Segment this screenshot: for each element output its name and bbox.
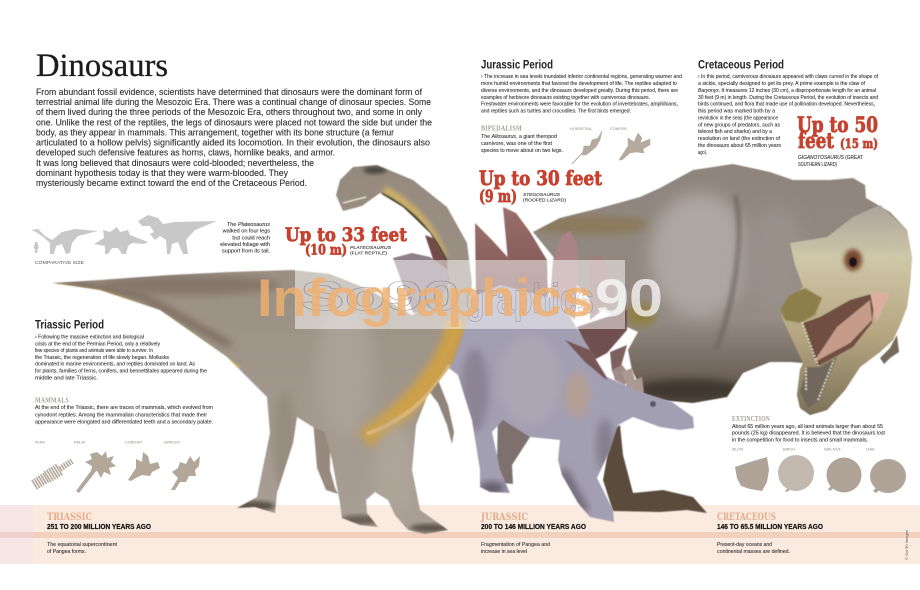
plateosaurus silhouette xyxy=(31,229,98,254)
body text: this period was marked both by a xyxy=(698,109,776,115)
far leg and foot xyxy=(603,425,707,513)
icon: ginkgo xyxy=(171,456,200,490)
body xyxy=(533,164,912,415)
intro text block xyxy=(36,87,432,189)
mammals note: cynodont reptiles. Among the mammalian characteristics that made their xyxy=(35,412,207,418)
size label: giganotosaurus: GIGANOTOSAURUS (GREAT xyxy=(798,155,864,161)
plant labels xyxy=(570,127,627,131)
body text: in the competition for food to insects and small mammals. xyxy=(732,437,868,443)
plateosaurus note: but could reach xyxy=(232,235,270,241)
timeline band xyxy=(0,505,920,564)
icon: oak xyxy=(870,459,906,493)
icon: human xyxy=(34,242,38,253)
body text: more humid environments that favored the development of life. The reptiles adapted to xyxy=(481,81,677,87)
bipedalism note: carnivore, was one of the first xyxy=(481,141,552,147)
intro text block: articulated to a hollow pelvis) significantly aided its locomotion. In their evolution, the dinosaurs also xyxy=(36,138,430,148)
intro text block: From abundant fossil evidence, scientists have determined that dinosaurs were the dominant form of xyxy=(36,87,422,98)
body text: the dinosaurs about 65 million years xyxy=(698,143,781,149)
lower jaw inner xyxy=(800,357,837,408)
intro text block: dominant hypothesis today is that they were warm-blooded. They xyxy=(36,168,288,179)
heading: Jurassic Period xyxy=(481,58,553,72)
shading, belly and neck colouring xyxy=(60,166,457,532)
body text: of new groups of predators, such as xyxy=(698,123,780,129)
period label: triassic: 251 TO 200 MILLION YEARS AGO xyxy=(47,524,152,531)
plateosaurus note: The Plateosaurus xyxy=(227,222,270,228)
dorsal plates xyxy=(393,207,644,394)
tree labels xyxy=(732,448,876,452)
teeth xyxy=(802,322,834,400)
bipedalism note: species to move about on two legs. xyxy=(481,148,563,154)
plate on body xyxy=(565,340,608,380)
heading: EXTINCTION xyxy=(732,415,770,423)
period label: cretaceous: Present-day oceans and xyxy=(717,542,772,548)
tree labels: OAK xyxy=(866,448,876,452)
bipedalism note: BIPEDALISM xyxy=(481,124,522,132)
intro text block: body, as they appear in mammals. This arrangement, together with its bone structure (a femur xyxy=(36,128,395,138)
plant labels xyxy=(35,440,180,444)
watermark outline text: So90 xyxy=(300,272,460,319)
body text: teleost fish and sharks) and by a xyxy=(698,129,773,135)
credit: © Sol 90 Images xyxy=(904,530,909,560)
mammals note: At the end of the Triassic, there are traces of mammals, which evolved from xyxy=(35,405,213,411)
body xyxy=(445,285,694,522)
body shading xyxy=(530,193,805,401)
icon: palm xyxy=(76,451,116,493)
period label: triassic: TRIASSIC xyxy=(47,512,92,523)
body text xyxy=(35,335,207,381)
period label: cretaceous xyxy=(717,512,824,555)
size label: giganotosaurus: feet xyxy=(798,128,834,153)
body text: for plants, families of ferns, conifers, and bennettitales appeared during the xyxy=(35,368,207,374)
snout xyxy=(780,288,822,323)
body text: › Following the massive extinction and biological xyxy=(35,335,144,341)
watermark main text: Infographics xyxy=(257,269,593,328)
far hind leg xyxy=(497,415,530,484)
body text: examples of herbivore dinosaurs existing together with carnivorous dinosaurs. xyxy=(481,95,650,101)
period label: cretaceous: CRETACEOUS xyxy=(717,512,776,523)
size label: giganotosaurus: Up to 50 xyxy=(797,112,878,137)
icon: willow xyxy=(735,457,769,491)
far hind leg xyxy=(313,420,338,494)
period label: jurassic xyxy=(480,512,587,555)
bipedalism note xyxy=(481,124,563,154)
body text: resolution on land (the extinction of xyxy=(698,136,780,142)
body text: birds continued, and flora that made use of pollination developed. Nevertheless, xyxy=(698,102,875,108)
giganotosaurus xyxy=(530,164,912,513)
intro text block: of them lived during the three periods of the Mesozoic Era, others throughout two, and some in only xyxy=(36,107,422,118)
body text: ago). xyxy=(698,150,707,156)
plant labels: GINKGO xyxy=(164,440,180,444)
heading: Cretaceous Period xyxy=(698,58,784,72)
size label: giganotosaurus xyxy=(797,112,878,168)
mouth xyxy=(803,293,875,367)
body text: › The increase in sea levels inundated inferior continental regions, generating warmer and xyxy=(481,74,682,80)
stegosaurus silhouette xyxy=(94,227,148,254)
body text: the Triassic, the regeneration of life slowly began. Mollusks xyxy=(35,355,169,361)
size label: giganotosaurus: (15 m) xyxy=(840,137,878,152)
watermark xyxy=(257,260,663,329)
body text xyxy=(698,74,878,156)
size label: stegosaurus: (ROOFED LIZARD) xyxy=(523,198,566,204)
body text xyxy=(481,74,682,115)
mammals note xyxy=(35,396,213,425)
stegosaurus xyxy=(393,207,694,522)
period label: jurassic: increase in sea level xyxy=(481,549,527,555)
body text: crisis at the end of the Permian Period, only a relatively xyxy=(35,341,160,347)
plateosaurus note xyxy=(220,222,270,255)
bipedalism note: The Allosaurus, a giant theropod xyxy=(481,134,557,140)
mammals note: appearance were elongated and differentiated teeth and a secondary palate. xyxy=(35,419,213,425)
period label: triassic: The equatorial supercontinent xyxy=(47,542,117,548)
period label: jurassic: JURASSIC xyxy=(480,512,528,523)
body text: Baryonyx. It measures 12 inches (30 cm), a disproportionate length for an animal xyxy=(698,88,876,94)
tree labels: WALNUT xyxy=(824,448,842,452)
size label: plateosaurus: Up to 33 feet xyxy=(285,224,407,246)
period label: jurassic: Fragmentation of Pangea and xyxy=(481,542,550,548)
period label: triassic: of Pangea forms. xyxy=(47,549,86,555)
body text: and reptiles such as turtles and crocodiles. The first birds emerged. xyxy=(481,109,631,115)
size label: plateosaurus: (10 m) xyxy=(305,242,347,258)
body text: diverse environments, and the dinosaurs developed greatly. During this period, there are xyxy=(481,88,678,94)
body text: dominated in marine environments, and reptiles dominated on land. As xyxy=(35,362,195,368)
body xyxy=(52,165,472,534)
icon: horsetail xyxy=(572,131,602,164)
plant labels: CONIFER xyxy=(125,440,142,444)
icon: walnut xyxy=(826,458,862,492)
comparative size caption: COMPARATIVE SIZE xyxy=(35,260,84,265)
body text: › In this period, carnivorous dinosaurs appeared with claws curved in the shape of xyxy=(698,74,878,80)
icon: fern xyxy=(34,461,72,485)
jaw line xyxy=(343,197,366,203)
comparative size silhouettes xyxy=(31,215,217,254)
icon: birch xyxy=(778,455,814,492)
panel: extinction xyxy=(732,415,906,493)
panel: jurassic period xyxy=(479,58,682,207)
size label: giganotosaurus: SOUTHERN LIZARD) xyxy=(798,162,837,168)
size label: plateosaurus xyxy=(285,224,407,258)
body text: revolution in the seas (the appearance xyxy=(698,116,778,122)
title: Dinosaurs xyxy=(36,48,168,84)
size label: stegosaurus: STEGOSAURUS xyxy=(523,192,561,198)
watermark number: 90 xyxy=(595,269,663,328)
body text: a sickle, specially designed to get its prey. A prime example is the claw of xyxy=(698,81,865,87)
plateosaurus xyxy=(52,165,472,534)
body text: 30 feet (9 m) in length. During the Cretaceous Period, the evolution of insects and xyxy=(698,95,878,101)
body text: About 65 million years ago, all land animals larger than about 55 xyxy=(732,424,883,430)
panel: cretaceous period xyxy=(698,58,878,168)
body text: few species of plants and animals were able to survive. In xyxy=(35,348,153,354)
tail xyxy=(427,377,454,444)
panel: triassic period xyxy=(34,318,213,493)
eye xyxy=(844,249,862,271)
intro text block: terrestrial animal life during the Mesozoic Era. There was a continual change of dinosaur species. Some xyxy=(36,97,431,108)
body text xyxy=(732,424,885,443)
mouth corner xyxy=(870,292,890,323)
intro text block: It was long believed that dinosaurs were cold-blooded; nevertheless, the xyxy=(36,158,314,169)
icon: conifer xyxy=(619,133,650,160)
intro text block: developed such defensive features as horns, claws, hornlike beaks, and armor. xyxy=(36,148,335,158)
body text: middle and late Triassic. xyxy=(35,375,98,381)
size label: plateosaurus: (FLAT REPTILE) xyxy=(350,250,387,256)
period label: cretaceous: 146 TO 65.5 MILLION YEARS AGO xyxy=(717,524,824,531)
period label: cretaceous: continental masses are defined. xyxy=(717,549,790,555)
plant labels: HORSETAIL xyxy=(570,127,592,131)
period label: jurassic: 200 TO 146 MILLION YEARS AGO xyxy=(481,524,587,531)
plateosaurus note: walked on four legs xyxy=(222,229,270,235)
mammals note: MAMMALS xyxy=(35,396,69,404)
tree labels: WILLOW xyxy=(732,448,743,452)
body text: pounds (25 kg) disappeared. It is believed that the dinosaurs lost xyxy=(732,431,885,437)
plateosaurus note: elevated foliage with xyxy=(220,242,270,248)
plateosaurus note: support from its tail. xyxy=(222,249,270,255)
period label: triassic xyxy=(47,512,152,555)
intro text block: one. Unlike the rest of the reptiles, the legs of dinosaurs were placed not toward the side but under the xyxy=(36,118,432,128)
heading: Triassic Period xyxy=(35,318,104,332)
watermark outline text: graphics xyxy=(466,275,594,322)
body shading xyxy=(461,335,656,512)
size label: stegosaurus xyxy=(479,166,603,207)
head xyxy=(780,205,912,415)
plant labels: CONIFER xyxy=(610,127,627,131)
size label: stegosaurus: (9 m) xyxy=(479,187,517,207)
tongue xyxy=(813,300,872,363)
tree labels: BIRCH xyxy=(783,448,795,452)
watermark outline text xyxy=(300,272,594,322)
plant labels: PALM xyxy=(74,440,85,444)
size label: plateosaurus: PLATEOSAURUS xyxy=(350,245,392,251)
giganotosaurus silhouette xyxy=(138,215,217,254)
intro text block: mysteriously became extinct toward the end of the Cretaceous Period. xyxy=(36,178,307,189)
plant labels: FERN xyxy=(35,440,45,444)
small arm xyxy=(880,335,899,364)
icon: conifer xyxy=(128,452,160,481)
size label: stegosaurus: Up to 30 feet xyxy=(479,166,603,190)
body text: Freshwater environments were favorable for the evolution of invertebrates, amphibians, xyxy=(481,102,678,108)
